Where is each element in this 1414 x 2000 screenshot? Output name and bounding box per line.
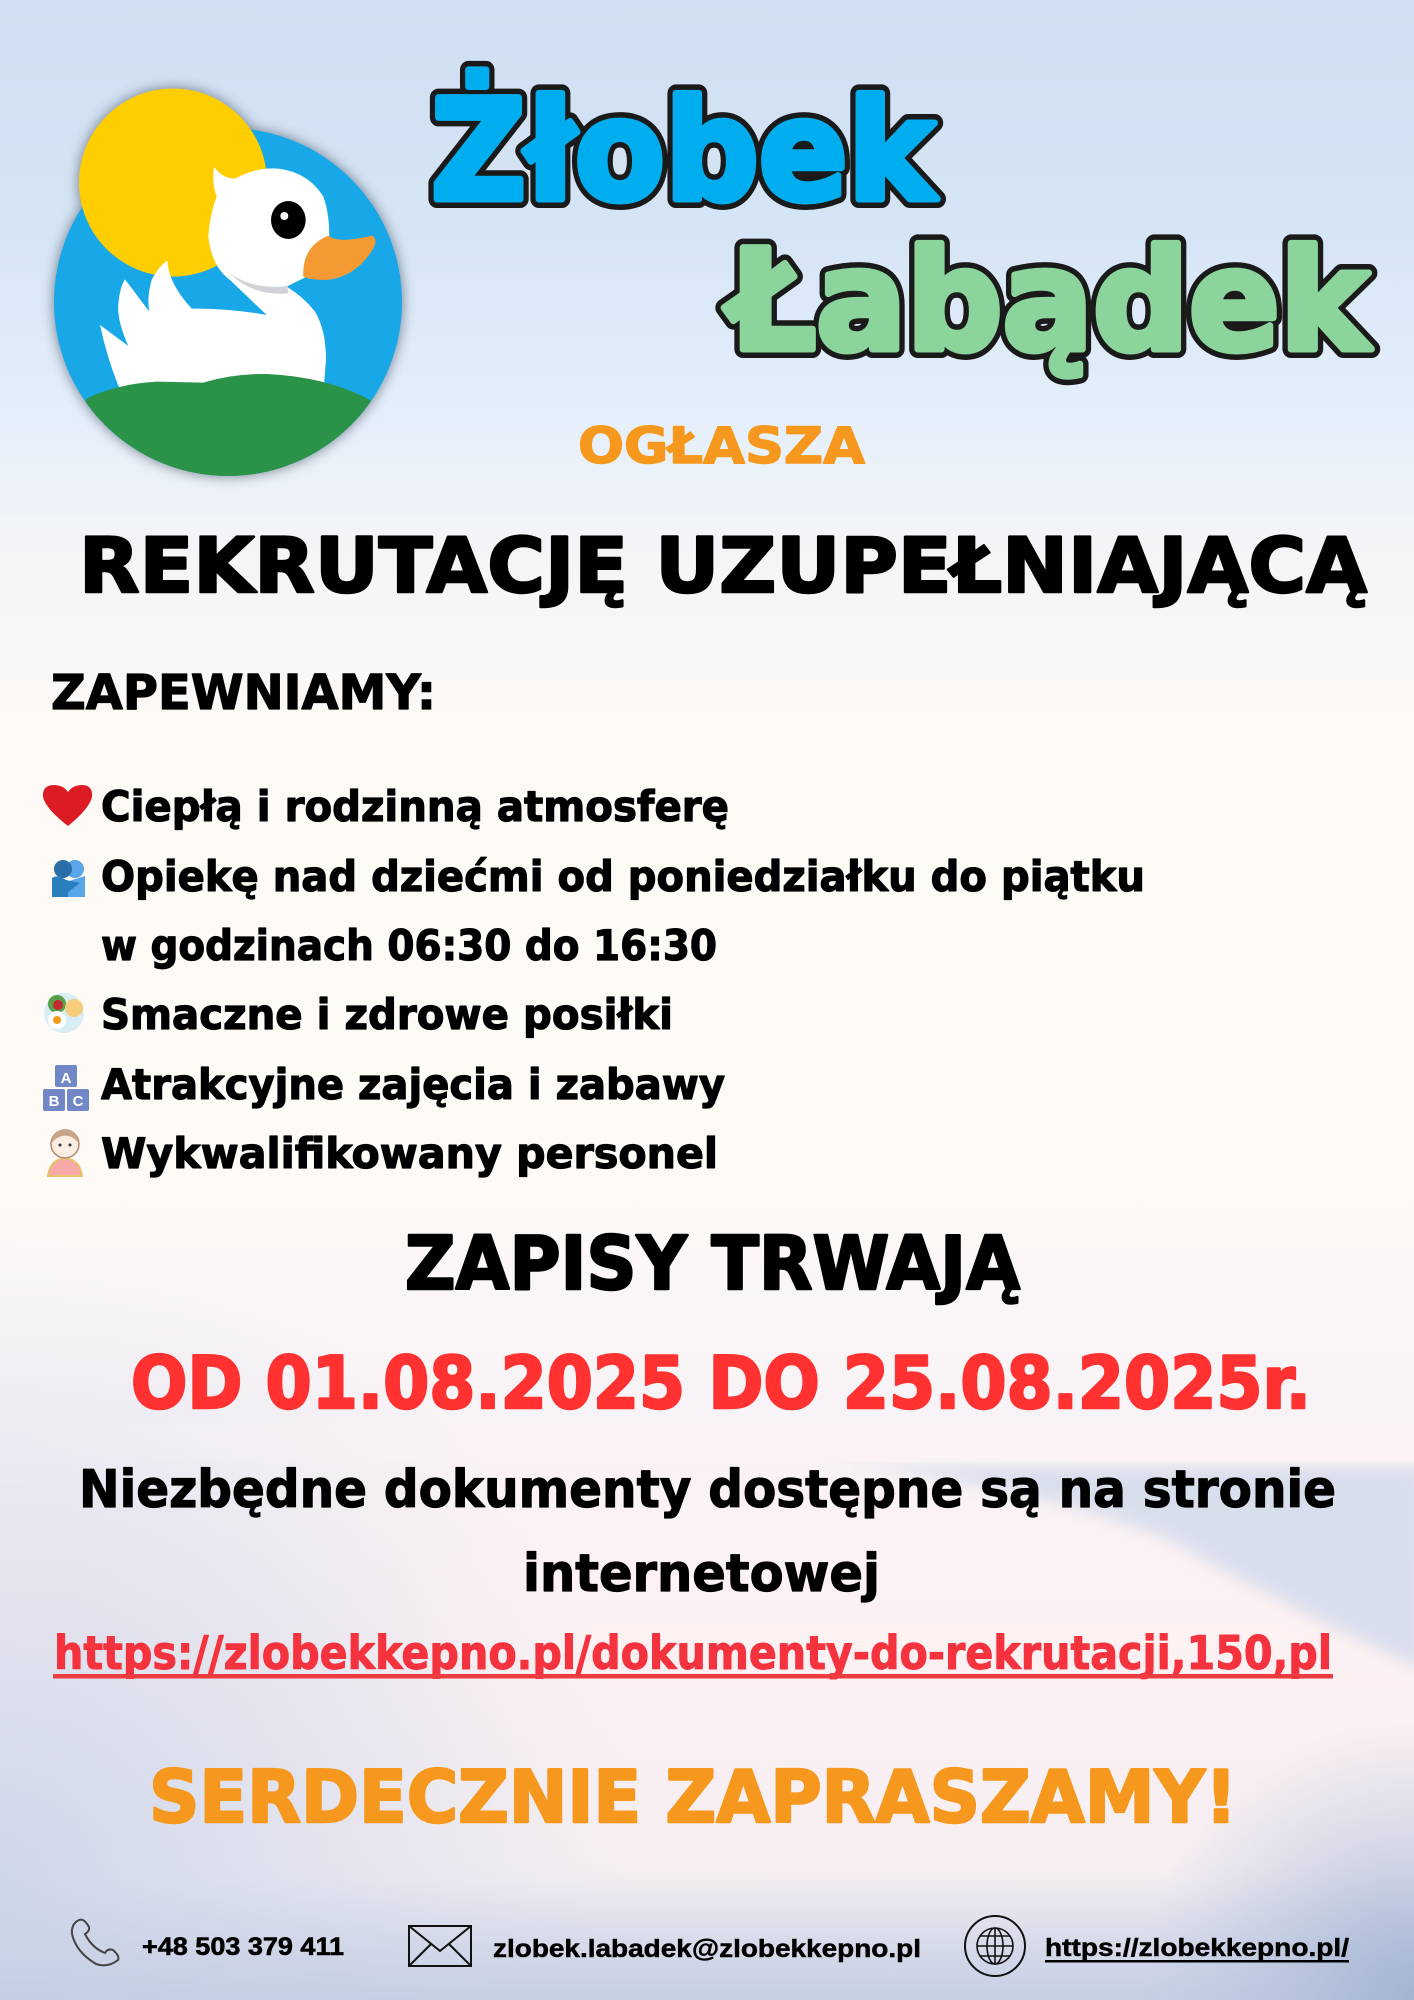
icon: globe: [965, 1916, 1025, 1976]
icon: alphabet blocks: A: [61, 1070, 72, 1087]
duck beak: [303, 236, 375, 280]
documents note: internetowej: [523, 1544, 880, 1604]
logo shadow: [53, 88, 403, 477]
email address: zlobek.labadek@zlobekkepno.pl: [493, 1935, 921, 1963]
logo: duck with sun: [53, 88, 407, 503]
list of benefits: [43, 782, 1145, 1178]
subheading: OGŁASZA: OGŁASZA: [578, 417, 865, 475]
footer contacts: [72, 1916, 1349, 1976]
benefit: hours: w godzinach 06:30 do 16:30: [101, 921, 717, 970]
documents note: Niezbędne dokumenty dostępne są na stronie: [79, 1460, 1336, 1520]
logo sun: [79, 88, 267, 276]
invitation: SERDECZNIE ZAPRASZAMY!: [149, 1755, 1237, 1839]
benefit: staff: Wykwalifikowany personel: [101, 1129, 718, 1178]
logo duck: [100, 167, 375, 393]
duck collar: [230, 273, 288, 294]
logo grass: [86, 374, 370, 476]
icon: alphabet blocks: C: [73, 1093, 84, 1110]
icon: envelope: [409, 1926, 471, 1966]
duck eye: [271, 201, 306, 239]
documents note: [79, 1460, 1336, 1604]
benefit: care: Opiekę nad dziećmi od poniedziałku do piątku: [101, 852, 1145, 901]
benefit: activities: Atrakcyjne zajęcia i zabawy: [101, 1060, 725, 1109]
logo blue disc: [54, 128, 402, 476]
icon: food plate: [44, 993, 84, 1033]
title: Łabądek: Łabądek: [723, 220, 1372, 382]
heading: ZAPEWNIAMY: ZAPEWNIAMY:: [51, 665, 436, 721]
phone number: +48 503 379 411: [142, 1933, 344, 1961]
icon: phone: [72, 1920, 118, 1965]
title: Łabądek: Łabądek: [723, 220, 1372, 382]
icon: alphabet blocks: [43, 1065, 89, 1111]
benefit: atmosphere: Ciepłą i rodzinną atmosferę: [101, 782, 729, 831]
title: Żłobek: Żłobek: [431, 69, 938, 232]
heading: registration ongoing: ZAPISY TRWAJĄ: [405, 1221, 1020, 1307]
website link: https://zlobekkepno.pl/: [1045, 1934, 1349, 1962]
heading: recruitment: REKRUTACJĘ UZUPEŁNIAJĄCĄ: [79, 521, 1367, 610]
icon: hugging people: [52, 860, 85, 897]
icon: heart: [43, 785, 92, 826]
title: Żłobek: Żłobek: [431, 69, 938, 232]
icon: caregiver: [48, 1130, 82, 1176]
benefit: meals: Smaczne i zdrowe posiłki: [101, 990, 673, 1039]
dates: OD 01.08.2025 DO 25.08.2025r.: [131, 1341, 1311, 1425]
icon: alphabet blocks: B: [49, 1093, 60, 1110]
